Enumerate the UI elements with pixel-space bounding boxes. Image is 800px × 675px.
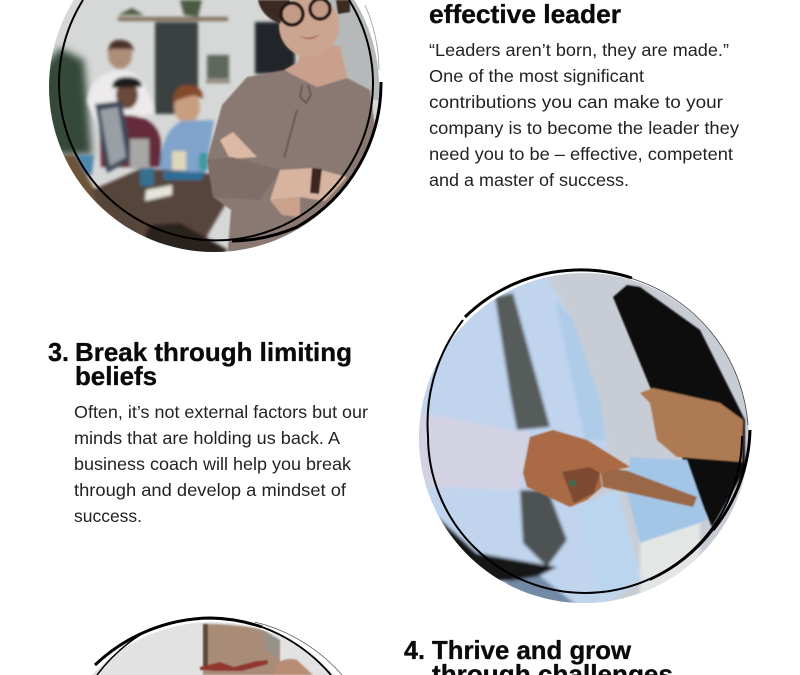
heading: 3. break through limiting beliefs: Break through limiting	[75, 337, 352, 367]
text block: leaders are made	[429, 40, 739, 190]
text block: leaders are made: need you to be – effective, competent	[429, 144, 733, 164]
text block: limiting beliefs: through and develop a mindset of	[74, 480, 346, 500]
text block: limiting beliefs: business coach will help you break	[74, 454, 351, 474]
text block: leaders are made: One of the most significant	[429, 66, 644, 86]
heading: 4. thrive and grow through challenges	[404, 635, 673, 675]
text block: limiting beliefs: minds that are holding us back. A	[74, 428, 340, 448]
photo: man adjusting glasses	[92, 616, 342, 675]
text block: limiting beliefs	[74, 402, 368, 526]
photo: leader with her team	[40, 0, 390, 260]
text block: leaders are made: “Leaders aren’t born, they are made.”	[429, 40, 729, 60]
heading: 4. thrive and grow through challenges: Thrive and grow	[432, 635, 632, 665]
text block: leaders are made: company is to become the leader they	[429, 118, 739, 138]
photo: handshake	[400, 270, 755, 612]
text block: leaders are made: contributions you can make to your	[429, 92, 723, 112]
text block: leaders are made: and a master of success.	[429, 170, 629, 190]
text block: limiting beliefs: Often, it’s not external factors but our	[74, 402, 368, 422]
text block: limiting beliefs: success.	[74, 506, 142, 526]
heading: 3. break through limiting beliefs	[48, 337, 352, 391]
decorative ring strokes	[95, 618, 342, 675]
heading: 3. break through limiting beliefs: beliefs	[75, 361, 157, 391]
heading: 4. thrive and grow through challenges: 4.	[404, 635, 425, 665]
decorative ring strokes	[428, 270, 750, 593]
decorative ring strokes	[59, 0, 381, 241]
heading: 3. break through limiting beliefs: 3.	[48, 337, 69, 367]
